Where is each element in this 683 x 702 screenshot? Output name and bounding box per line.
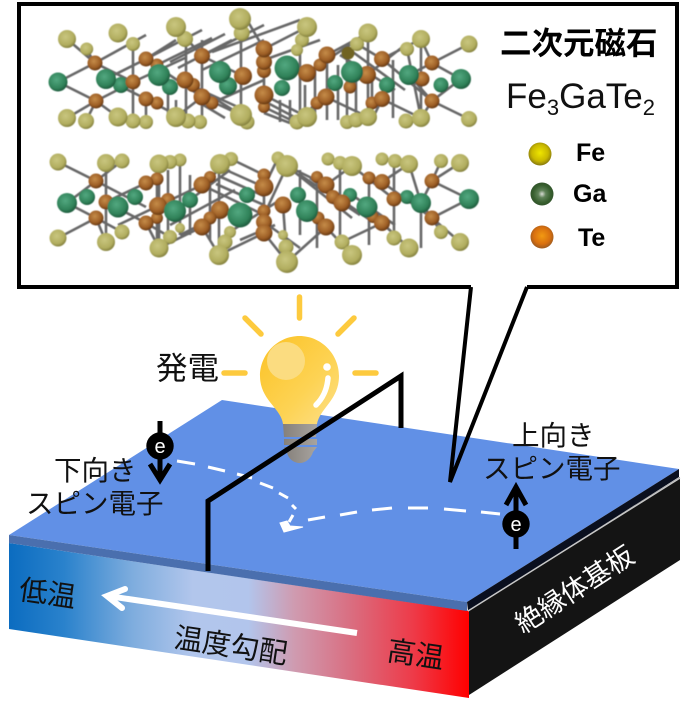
device: film right edge [467,469,680,611]
arrow: temperature gradient direction [107,589,357,633]
label: spin-down electrons: 下向き [54,455,136,486]
spin up electron icon [502,487,530,549]
spin up electron icon: e [510,514,522,536]
device: magnet film top surface [9,400,679,602]
legend: Fe [528,139,605,167]
formula: Fe3GaTe2: 2 [643,95,655,120]
crystal structure: upper layer [48,8,478,130]
legend: Te: Te [578,224,605,252]
formula: Fe3GaTe2: Fe [506,77,547,116]
spin down electron icon [146,421,174,480]
spin down electron icon: e [154,436,166,458]
heading: two-dimensional magnet: 二次元磁石 [500,25,658,61]
formula: Fe3GaTe2: 3 [547,95,559,120]
label: low temperature: 低温 [17,574,78,614]
legend: Fe: Fe [576,139,605,167]
label: power generation: 発電 [156,350,219,386]
formula: Fe3GaTe2: GaTe [559,77,643,116]
wire circuit [208,376,401,571]
label: insulating substrate: 絶縁体基板 [510,540,639,639]
legend: Te [530,224,605,252]
label: spin-up electrons: 上向き [512,420,594,451]
device: film front edge [9,535,467,611]
callout: crystal structure panel [19,4,677,287]
label: high temperature: 高温 [385,635,446,675]
icon: light bulb rays [224,297,376,373]
device: temperature gradient front face [9,543,469,698]
device: insulating substrate side [467,477,680,695]
label: spin-down electrons: スピン電子 [26,488,164,519]
legend: Ga [530,180,607,208]
icon: light bulb [260,336,339,463]
label: temperature gradient: 温度勾配 [172,622,289,671]
callout pointer to film surface [450,287,527,482]
spin electron flow: dashed path [177,461,500,532]
crystal structure: lower layer [50,152,479,273]
label: spin-up electrons: スピン電子 [483,453,620,484]
legend: Ga: Ga [573,180,607,208]
